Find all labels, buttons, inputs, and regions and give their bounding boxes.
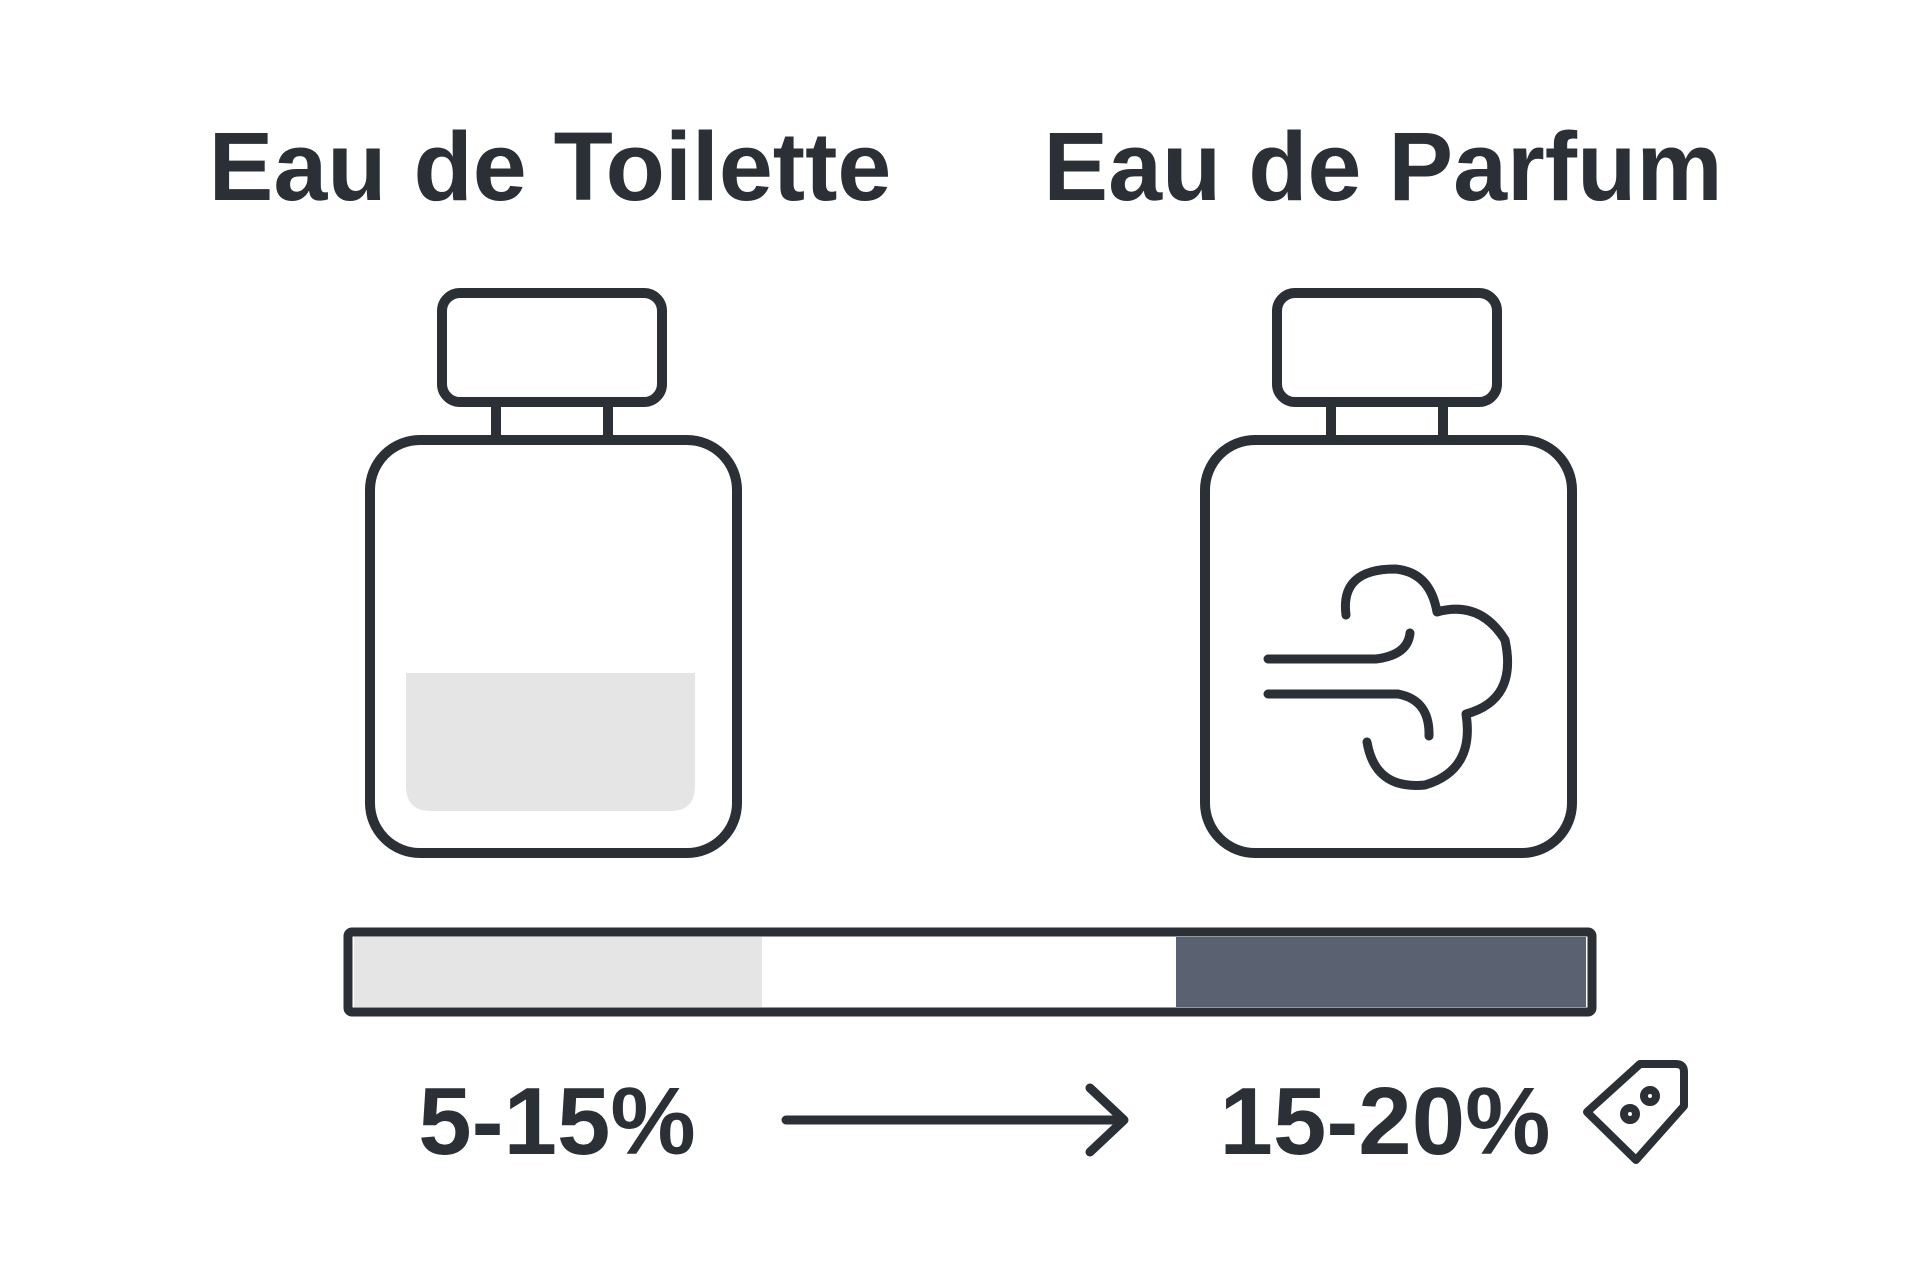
label: 5-15%: 5-15%: [418, 1068, 696, 1175]
title: Eau de Parfum: Eau de Parfum: [1043, 112, 1723, 221]
bottle: eau de toilette: [370, 293, 737, 853]
arrow: [786, 1088, 1124, 1152]
title: Eau de Toilette: Eau de Toilette: [209, 112, 891, 221]
label: 15-20%: 15-20%: [1220, 1068, 1550, 1175]
bottle: eau de parfum: [1205, 293, 1572, 853]
concentration bar: [348, 932, 1592, 1012]
icon: price tag: [1587, 1064, 1684, 1160]
icon: scent cloud: [1268, 569, 1508, 785]
liquid level: [406, 673, 695, 811]
